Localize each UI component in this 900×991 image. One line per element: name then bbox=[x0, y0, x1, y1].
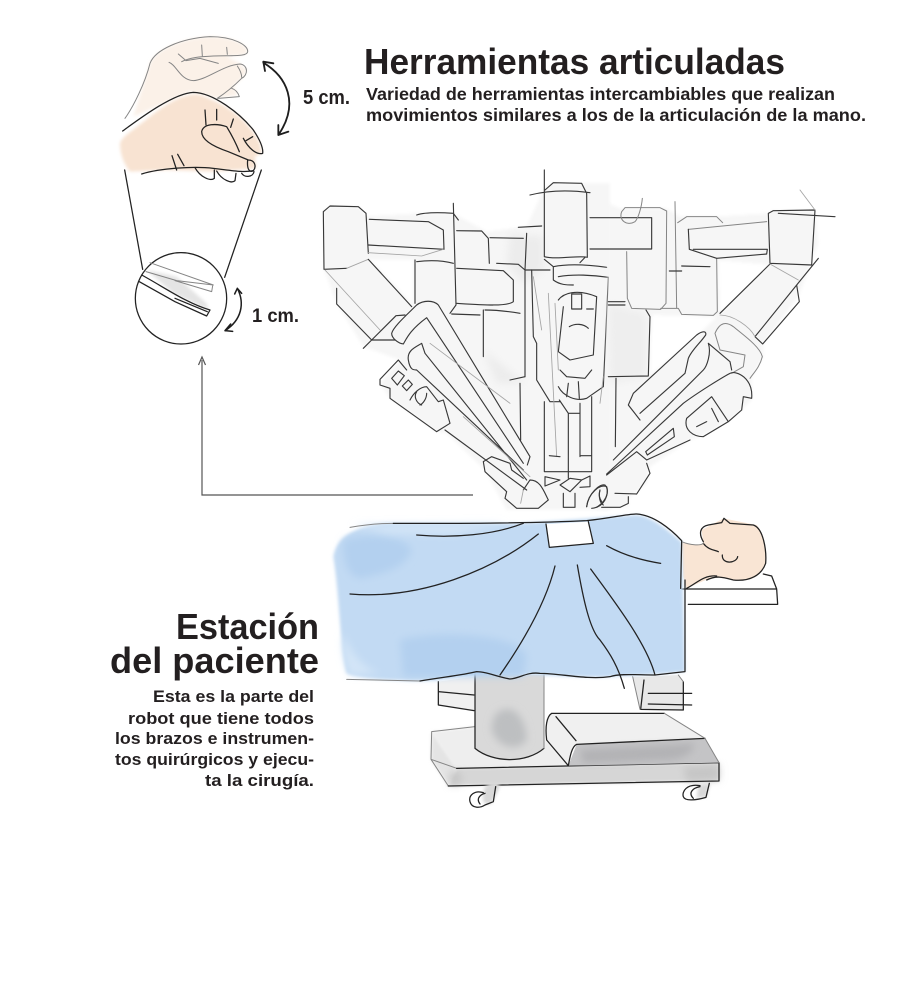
text block: tools description bbox=[366, 84, 866, 125]
text block: tools description: Variedad de herramientas intercambiables que realizan bbox=[366, 84, 835, 104]
padded base block bbox=[546, 713, 719, 766]
zoom cone lines and tweezers circle bbox=[125, 170, 261, 344]
icon: hand showing 5 cm motion bbox=[120, 37, 263, 182]
heading: Herramientas articuladas: Herramientas articuladas bbox=[364, 41, 785, 82]
text block: patient station description: tos quirúrgicos y ejecu- bbox=[115, 751, 314, 769]
table side supports bbox=[438, 675, 692, 711]
text block: tools description: movimientos similares a los de la articulación de la mano. bbox=[366, 105, 866, 125]
text block: patient station description bbox=[115, 688, 314, 790]
text block: patient station description: robot que tiene todos bbox=[128, 710, 314, 728]
icon: tweezers bbox=[139, 263, 213, 316]
arrow: 1 cm range bbox=[225, 288, 242, 331]
patient head bbox=[682, 518, 766, 588]
heading: Estación del paciente: del paciente bbox=[110, 640, 319, 681]
heading: Estación del paciente bbox=[110, 606, 319, 681]
text block: patient station description: los brazos e instrumen- bbox=[115, 730, 314, 748]
robot left half bbox=[323, 170, 610, 510]
lower hand, skin tone bbox=[120, 92, 263, 182]
patient on table bbox=[333, 514, 778, 807]
blue surgical drape bbox=[333, 514, 685, 688]
table base with wheels bbox=[431, 727, 719, 807]
upper hand, faded bbox=[125, 37, 248, 118]
head pillow bbox=[682, 574, 778, 604]
arrow: from robot to instrument detail bbox=[198, 357, 473, 495]
label: 1 cm: 1 cm. bbox=[252, 306, 299, 327]
arrow: 5 cm range bbox=[263, 62, 289, 135]
table column bbox=[475, 673, 544, 760]
text block: patient station description: Esta es la parte del bbox=[153, 688, 314, 706]
text block: patient station description: ta la cirugía. bbox=[205, 772, 314, 790]
robot right half bbox=[587, 190, 835, 510]
heading: Estación del paciente: Estación bbox=[176, 606, 319, 647]
label: 5 cm: 5 cm. bbox=[303, 87, 350, 109]
robot: patient cart arms bbox=[323, 170, 835, 510]
